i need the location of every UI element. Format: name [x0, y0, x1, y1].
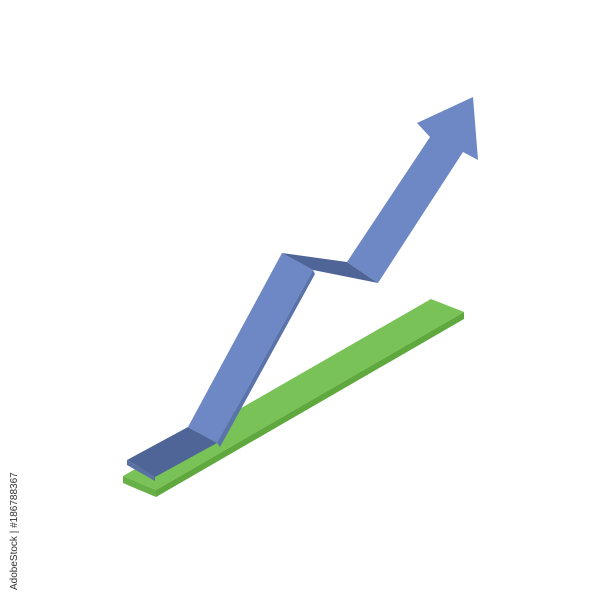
vertical stock id text: AdobeStock | #186788367: [9, 472, 20, 590]
green base bar: [123, 299, 464, 497]
blue rising arrow: [127, 97, 478, 481]
